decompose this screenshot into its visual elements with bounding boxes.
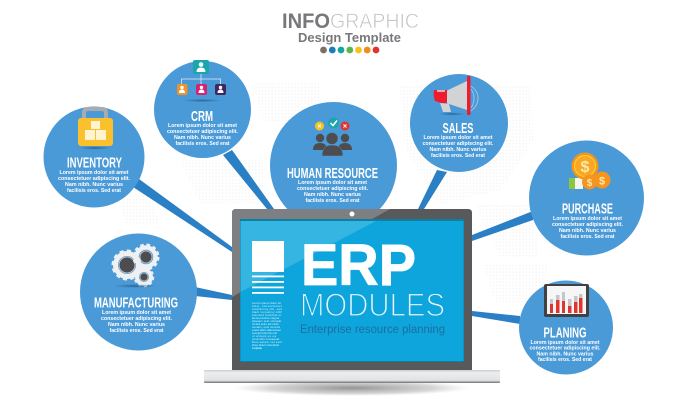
connector lines [133, 150, 533, 324]
panel: human resource: consectetuer adipiscing elit. [297, 186, 368, 192]
panel: manufacturing: Nam nibh. Nunc varius [108, 322, 165, 328]
panel: manufacturing: MANUFACTURING [94, 294, 178, 312]
panel: planing: consectetuer adipiscing elit. [530, 346, 601, 352]
screen small text [252, 301, 283, 350]
panel: sales [410, 74, 508, 172]
icon: gears [113, 245, 158, 288]
laptop [204, 209, 500, 396]
panel: crm: CRM [191, 108, 213, 125]
panel: manufacturing: facilisis eros. Sed erat [110, 328, 164, 334]
screen small text: adipiscing elit, sed [252, 307, 282, 311]
screen small text: iriure dolor in hendrerit [252, 343, 279, 347]
panel: inventory: Nam nibh. Nunc varius [65, 182, 123, 188]
icon: box padlock [78, 109, 113, 150]
screen small text: exerci tation ullamcorper [252, 328, 281, 332]
panel: manufacturing [80, 234, 197, 350]
panel: inventory: Lorem ipsum dolor sit amet [60, 170, 129, 176]
dotted world map background [120, 83, 547, 302]
panel: inventory: INVENTORY [67, 154, 122, 172]
panel: inventory [44, 106, 144, 208]
screen text: MODULES: MODULES [300, 287, 445, 323]
panel: purchase: facilisis eros. Sed erat [560, 234, 615, 240]
screen small text: diam nonummy nibh [252, 310, 282, 314]
icon: megaphone [434, 76, 478, 116]
title [282, 10, 419, 45]
screen small text: euismod tincidunt ut [252, 313, 281, 317]
screen text: ERP: ERP [301, 233, 416, 298]
panel: purchase: Nam nibh. Nunc varius [559, 228, 616, 234]
panel: human resource: Lorem ipsum dolor sit amet [298, 180, 367, 186]
panel: sales: Nam nibh. Nunc varius [430, 147, 486, 153]
panel: purchase: consectetuer adipiscing elit. [552, 222, 623, 228]
panel: planing [519, 280, 613, 374]
icon: coins and bills [569, 152, 610, 190]
title: Design Template [298, 31, 401, 45]
icon: coins and bills: $ [581, 159, 590, 176]
panel: crm: Nam nibh. Nunc varius [174, 135, 231, 141]
panel: human resource: Nam nibh. Nunc varius [304, 192, 361, 198]
panel: crm: Lorem ipsum dolor sit amet [168, 123, 237, 129]
screen small text: amet, consectetuer [252, 304, 282, 308]
panel: human resource: HUMAN RESOURCE [287, 165, 378, 182]
panel: planing: PLANING [544, 324, 586, 342]
screen text: subtitle: Enterprise resource planning [300, 324, 445, 336]
panel: crm [154, 60, 251, 158]
panel: human resource: facilisis eros. Sed erat [306, 198, 360, 204]
title: GRAPHIC [330, 10, 419, 33]
panel: planing: facilisis eros. Sed erat [538, 357, 592, 363]
title: INFO [282, 10, 330, 33]
panel: planing: Lorem ipsum dolor sit amet [530, 340, 600, 346]
icon: org chart [177, 60, 226, 102]
panel: planing: Nam nibh. Nunc varius [536, 352, 594, 358]
colour dots [320, 47, 379, 53]
icon: coins and bills: $ [587, 178, 593, 189]
panel: inventory: consectetuer adipiscing elit. [58, 176, 130, 182]
screen document block [252, 241, 284, 294]
panel: manufacturing: consectetuer adipiscing elit. [101, 316, 172, 322]
panel: manufacturing: Lorem ipsum dolor sit amet [102, 310, 171, 316]
panel: sales: SALES [442, 120, 474, 137]
screen small text: ut aliquip ex ea [252, 334, 276, 338]
panel: sales: facilisis eros. Sed erat [431, 153, 485, 159]
screen small text: laoreet dolore magna [252, 316, 279, 320]
screen small text: commodo consequat. [252, 337, 280, 341]
panel: sales: Lorem ipsum dolor sit amet [424, 135, 493, 141]
screen small text: veniam, quis nostrud [252, 325, 280, 329]
panel: sales: consectetuer adipiscing elit. [422, 141, 494, 147]
icon: coins and bills: $ [599, 176, 605, 188]
panel: purchase: PURCHASE [562, 200, 613, 218]
panel: human resource [270, 102, 397, 229]
screen small text: Lorem ipsum dolor sit [252, 301, 281, 305]
panel: inventory: facilisis eros. Sed erat [67, 188, 121, 194]
panel: crm: consectetuer adipiscing elit. [167, 129, 238, 135]
screen small text: Ut wisi enim ad minim [252, 322, 280, 326]
icon: tablet bar chart [544, 284, 589, 317]
screen small text: suscipit lobortis nisl [252, 331, 277, 335]
screen small text: Duis autem vel eum [252, 340, 283, 344]
screen small text: aliquam erat volutpat. [252, 319, 282, 323]
panel: crm: facilisis eros. Sed erat [176, 141, 230, 147]
panel: purchase: Lorem ipsum dolor sit amet [553, 216, 622, 222]
icon: team with check marks [313, 118, 352, 156]
panel: purchase [529, 140, 644, 256]
screen small text: in vulputate [252, 346, 262, 350]
